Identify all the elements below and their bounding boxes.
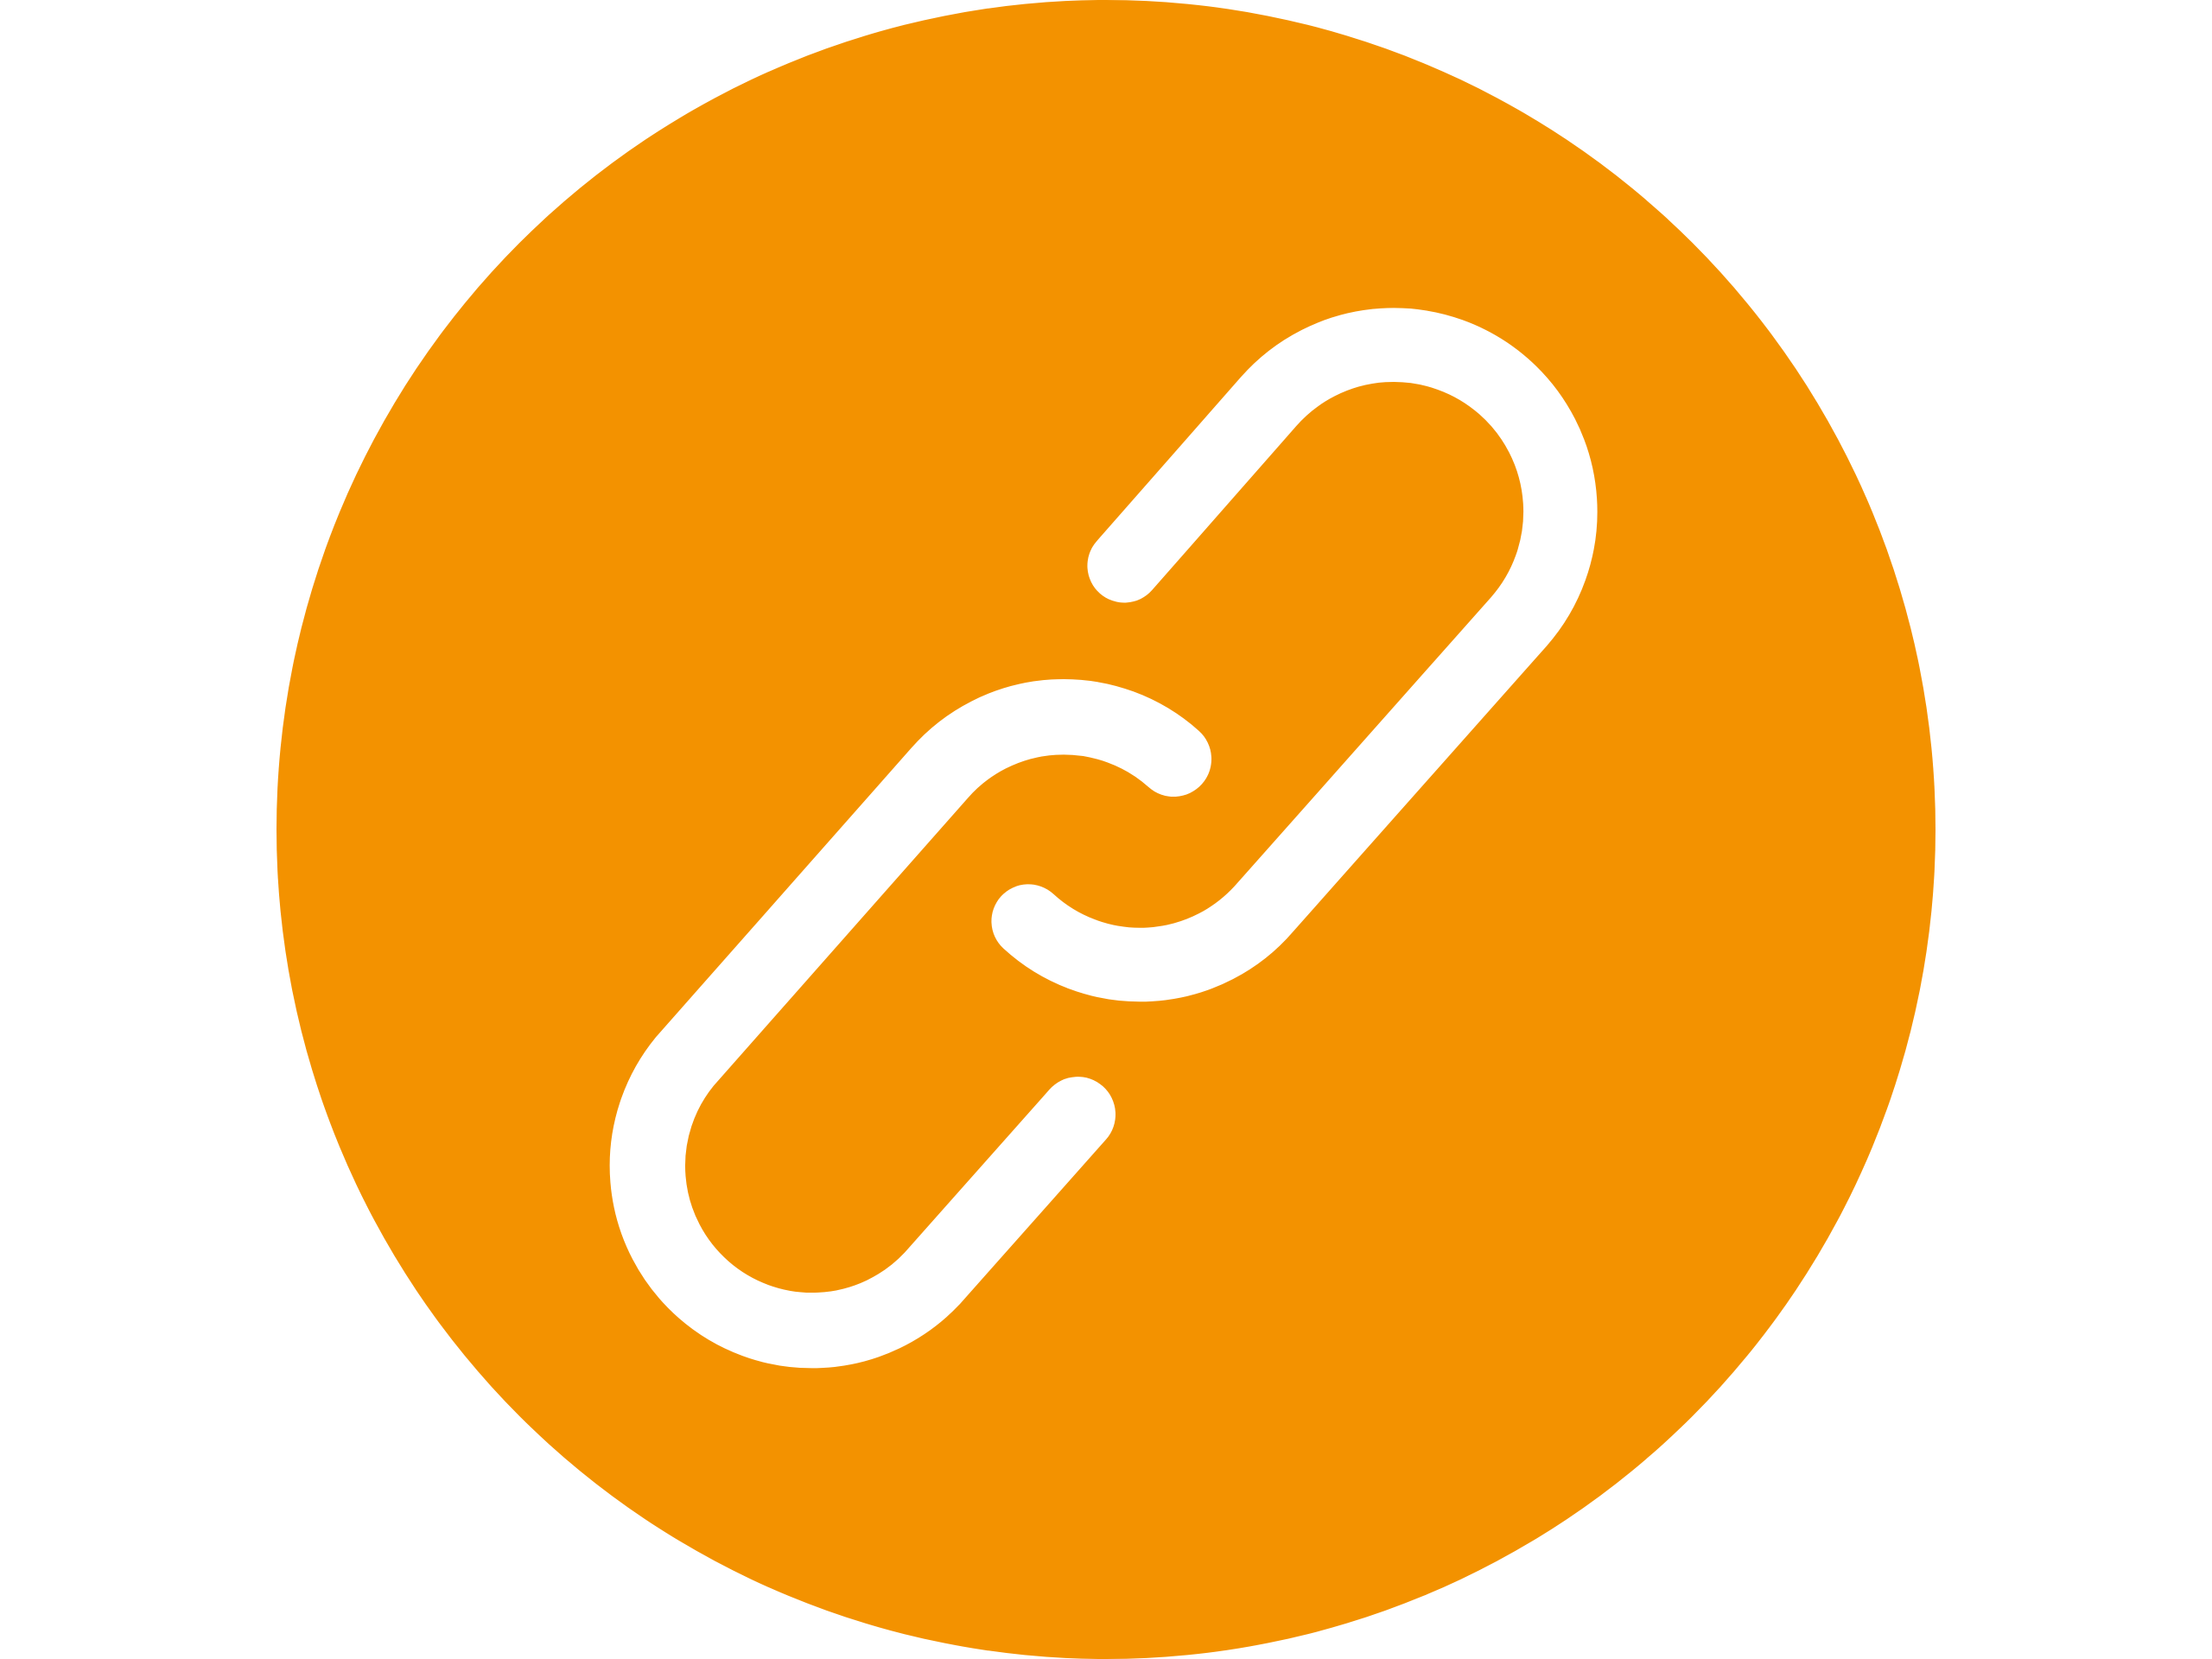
upper right link <box>1028 345 1560 964</box>
chain links <box>647 345 1560 1331</box>
orange circle background <box>276 0 1936 1659</box>
lower left link <box>647 717 1173 1331</box>
